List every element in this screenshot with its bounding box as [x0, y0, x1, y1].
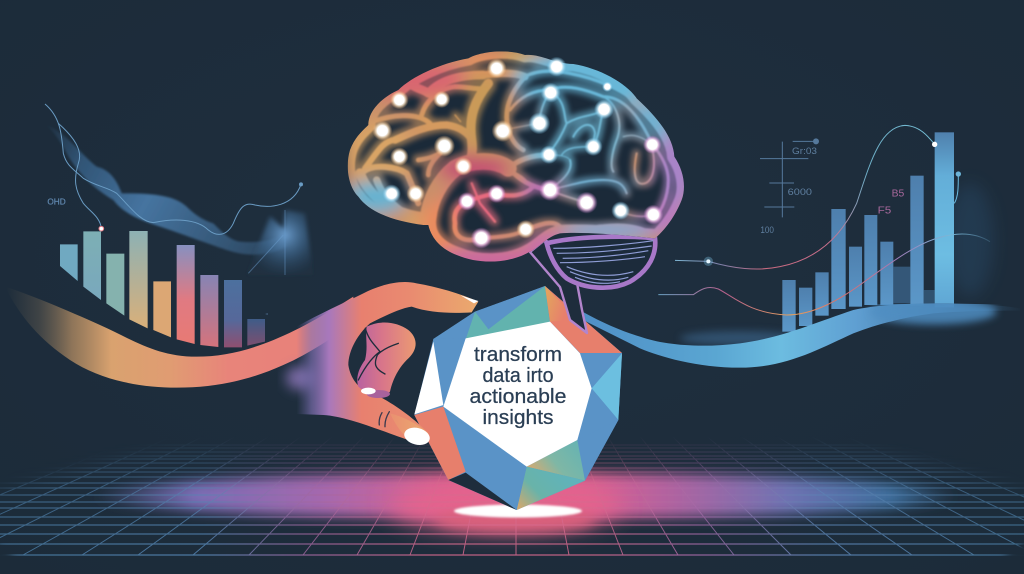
cerebrum folds colour map [348, 51, 684, 262]
blue ribbon [583, 303, 1020, 368]
curled finger [357, 323, 416, 398]
pink value labels: B5 [892, 189, 905, 200]
pink value labels [878, 189, 905, 216]
curve dots [704, 142, 961, 266]
axis labels: Gr:03 [792, 146, 817, 156]
brain [340, 40, 700, 333]
left chart group [5, 104, 353, 388]
brain stem [530, 240, 590, 333]
faceted gem [414, 286, 622, 510]
axis labels [760, 146, 817, 235]
neuron glow points [372, 57, 663, 249]
gem caption: transform [474, 343, 562, 366]
line chart trace [45, 104, 301, 234]
gem and hand group [297, 282, 622, 510]
hand [297, 282, 478, 448]
orange ribbon [5, 287, 353, 388]
axis labels: 100 [760, 225, 774, 235]
gem caption [470, 343, 566, 429]
thumbnail [402, 425, 432, 448]
bar chart [60, 231, 265, 347]
curve line one [675, 125, 935, 269]
ribbon fading underglow [870, 299, 997, 324]
axis scale [760, 138, 819, 217]
grid lines [0, 430, 1024, 555]
cerebellum [547, 237, 655, 288]
axis labels: 6000 [788, 187, 812, 197]
gem caption: data irto [482, 364, 554, 387]
floor glow [95, 473, 955, 532]
curve line two [658, 234, 990, 315]
ribbon halo [680, 183, 993, 346]
label OHD: OHD [47, 197, 66, 206]
small tick marks: •• [266, 312, 269, 316]
perspective floor grid [0, 430, 1024, 555]
gem caption: insights [482, 406, 554, 429]
brain drawing [340, 40, 700, 288]
right chart group [583, 125, 1020, 368]
bar chart [782, 132, 954, 332]
thumb highlight [390, 413, 428, 442]
gem caption: actionable [470, 385, 566, 408]
cerebrum silhouette [348, 51, 684, 262]
bright light pool [454, 504, 582, 518]
palm and index finger [297, 282, 478, 444]
line end dot [299, 182, 303, 186]
pink value labels: F5 [878, 205, 892, 216]
index fingernail [461, 295, 478, 303]
highlighted data point [99, 226, 104, 231]
blue smoke wave [47, 125, 287, 255]
wrist glow [286, 366, 314, 390]
curled fingernail [361, 388, 390, 398]
light burst [247, 210, 313, 275]
thumb knuckle creases [379, 412, 389, 427]
finger creases [358, 328, 398, 380]
